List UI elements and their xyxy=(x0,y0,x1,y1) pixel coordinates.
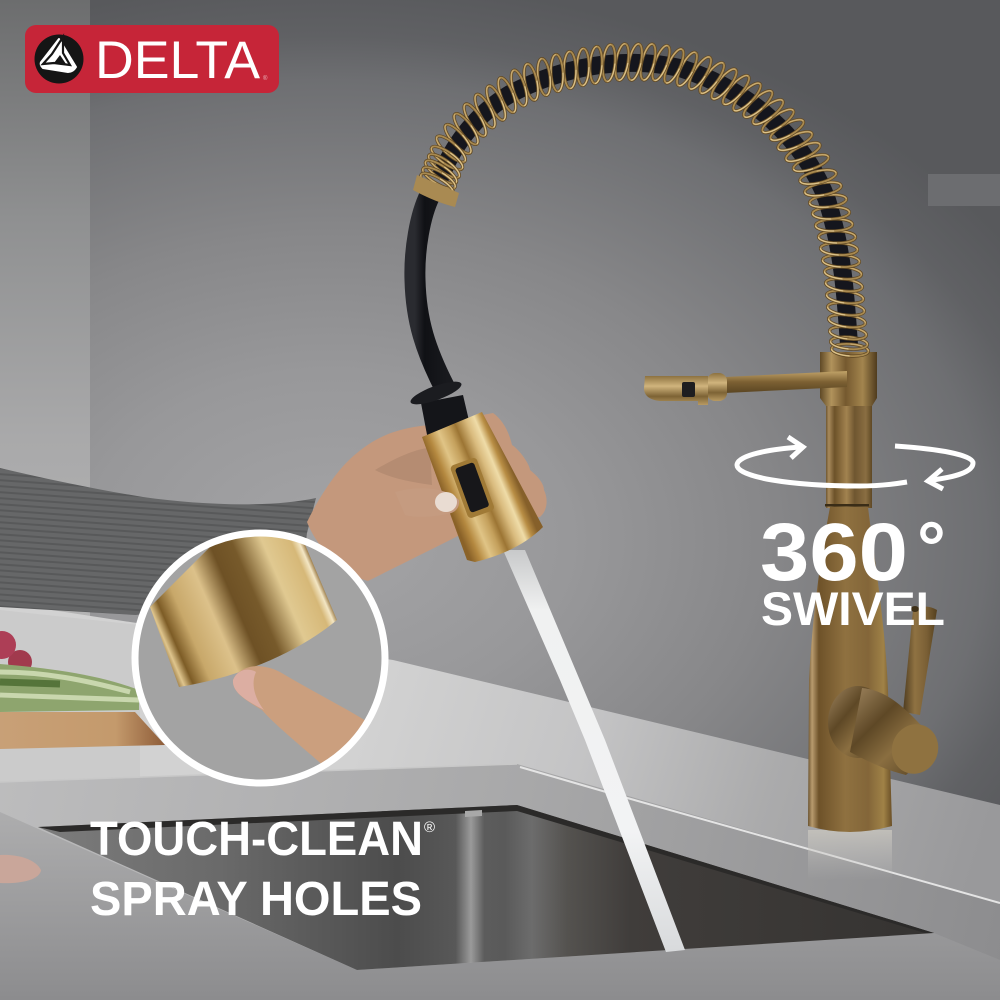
hand behind spray head xyxy=(307,413,547,581)
spray head neck xyxy=(408,377,470,440)
Delta logo badge: DELTA xyxy=(95,31,261,90)
spring end collar xyxy=(413,175,459,207)
black hose xyxy=(415,195,447,392)
spray head xyxy=(422,412,543,562)
spring coil xyxy=(437,62,850,350)
faucet handle xyxy=(828,606,945,780)
touch-clean label: SPRAY HOLES xyxy=(90,873,422,926)
wand holder arm xyxy=(644,371,847,405)
fingertips at left edge xyxy=(0,855,41,883)
callout circle: touch-clean detail xyxy=(135,528,385,783)
countertop xyxy=(0,602,1000,1000)
thumb xyxy=(395,488,459,517)
water stream xyxy=(503,550,685,952)
touch-clean label: ® xyxy=(424,819,435,836)
Delta logo badge: ® xyxy=(263,75,268,82)
gray sweater sleeve xyxy=(0,468,316,615)
touch-clean label xyxy=(90,813,435,926)
touch-clean label: TOUCH-CLEAN xyxy=(90,813,423,866)
sink basin xyxy=(38,805,934,970)
360 swivel label: SWIVEL xyxy=(761,582,945,635)
black tube inside spring xyxy=(440,63,849,345)
Delta logo badge xyxy=(25,25,279,93)
360 swivel label xyxy=(760,507,946,635)
360 swivel label: ° xyxy=(917,508,946,588)
cutting board and vegetables xyxy=(0,631,165,749)
faucet upper pipe and body xyxy=(808,352,892,832)
swivel arrows xyxy=(737,437,973,489)
faucet reflection on counter xyxy=(808,830,892,880)
360 swivel label: 360 xyxy=(760,507,908,598)
